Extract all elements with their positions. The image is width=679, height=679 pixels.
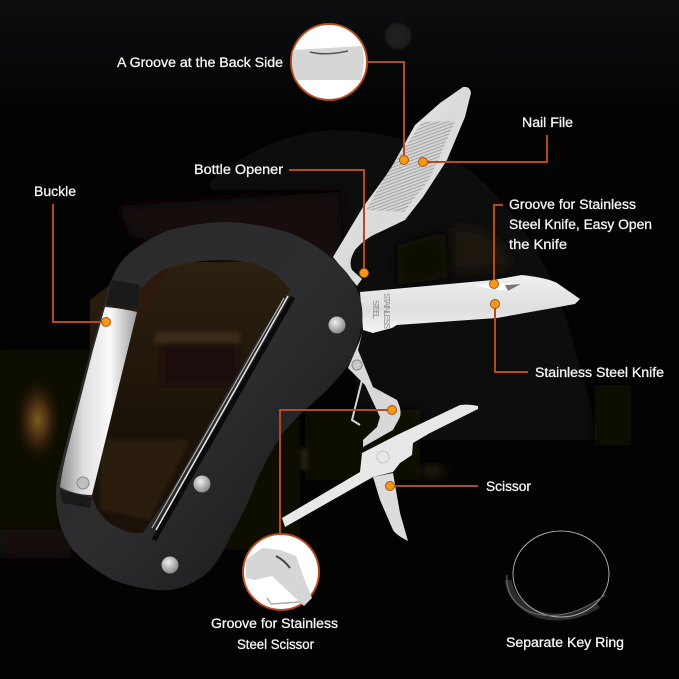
label: A Groove at the Back Side	[117, 55, 283, 71]
label: Bottle Opener	[194, 162, 283, 178]
label: Nail File	[522, 115, 573, 131]
nail file tool	[333, 87, 471, 286]
callout: groove for stainless steel knife: Steel Knife, Easy Open	[509, 217, 652, 233]
label: Buckle	[34, 184, 76, 200]
rivets	[328, 316, 346, 334]
callout: groove for stainless steel scissor: Steel Scissor	[237, 637, 314, 653]
carabiner inner highlight stripes	[154, 297, 293, 540]
callout: stainless steel knife	[490, 300, 664, 381]
label: Scissor	[486, 479, 531, 495]
stainless steel knife blade: STEEL	[371, 300, 381, 319]
label: Groove for Stainless	[211, 616, 338, 632]
stainless steel knife blade	[360, 275, 580, 333]
knife groove	[475, 283, 521, 291]
callout: nail file	[418, 115, 573, 166]
label: Groove for Stainless	[509, 197, 636, 213]
label: separate key ring: Separate Key Ring	[506, 635, 624, 651]
callout: bottle opener	[194, 162, 368, 278]
callout: groove for stainless steel knife: the Knife	[509, 237, 567, 253]
file texture	[366, 121, 455, 212]
callout: groove for stainless steel knife	[490, 197, 652, 288]
stainless steel etched mark: STAINLESS	[382, 293, 392, 329]
callout: buckle	[34, 184, 110, 326]
key ring	[507, 531, 609, 617]
scissor tool with handle and hook	[282, 330, 478, 541]
carabiner body	[56, 222, 362, 590]
callout: scissor	[386, 479, 531, 495]
callout: groove for stainless steel scissor	[211, 406, 396, 653]
callout: groove at back side	[117, 24, 408, 164]
gate	[60, 307, 137, 495]
lower scissor blade	[373, 473, 408, 541]
label: Stainless Steel Knife	[535, 365, 664, 381]
upper scissor blade	[282, 405, 478, 527]
